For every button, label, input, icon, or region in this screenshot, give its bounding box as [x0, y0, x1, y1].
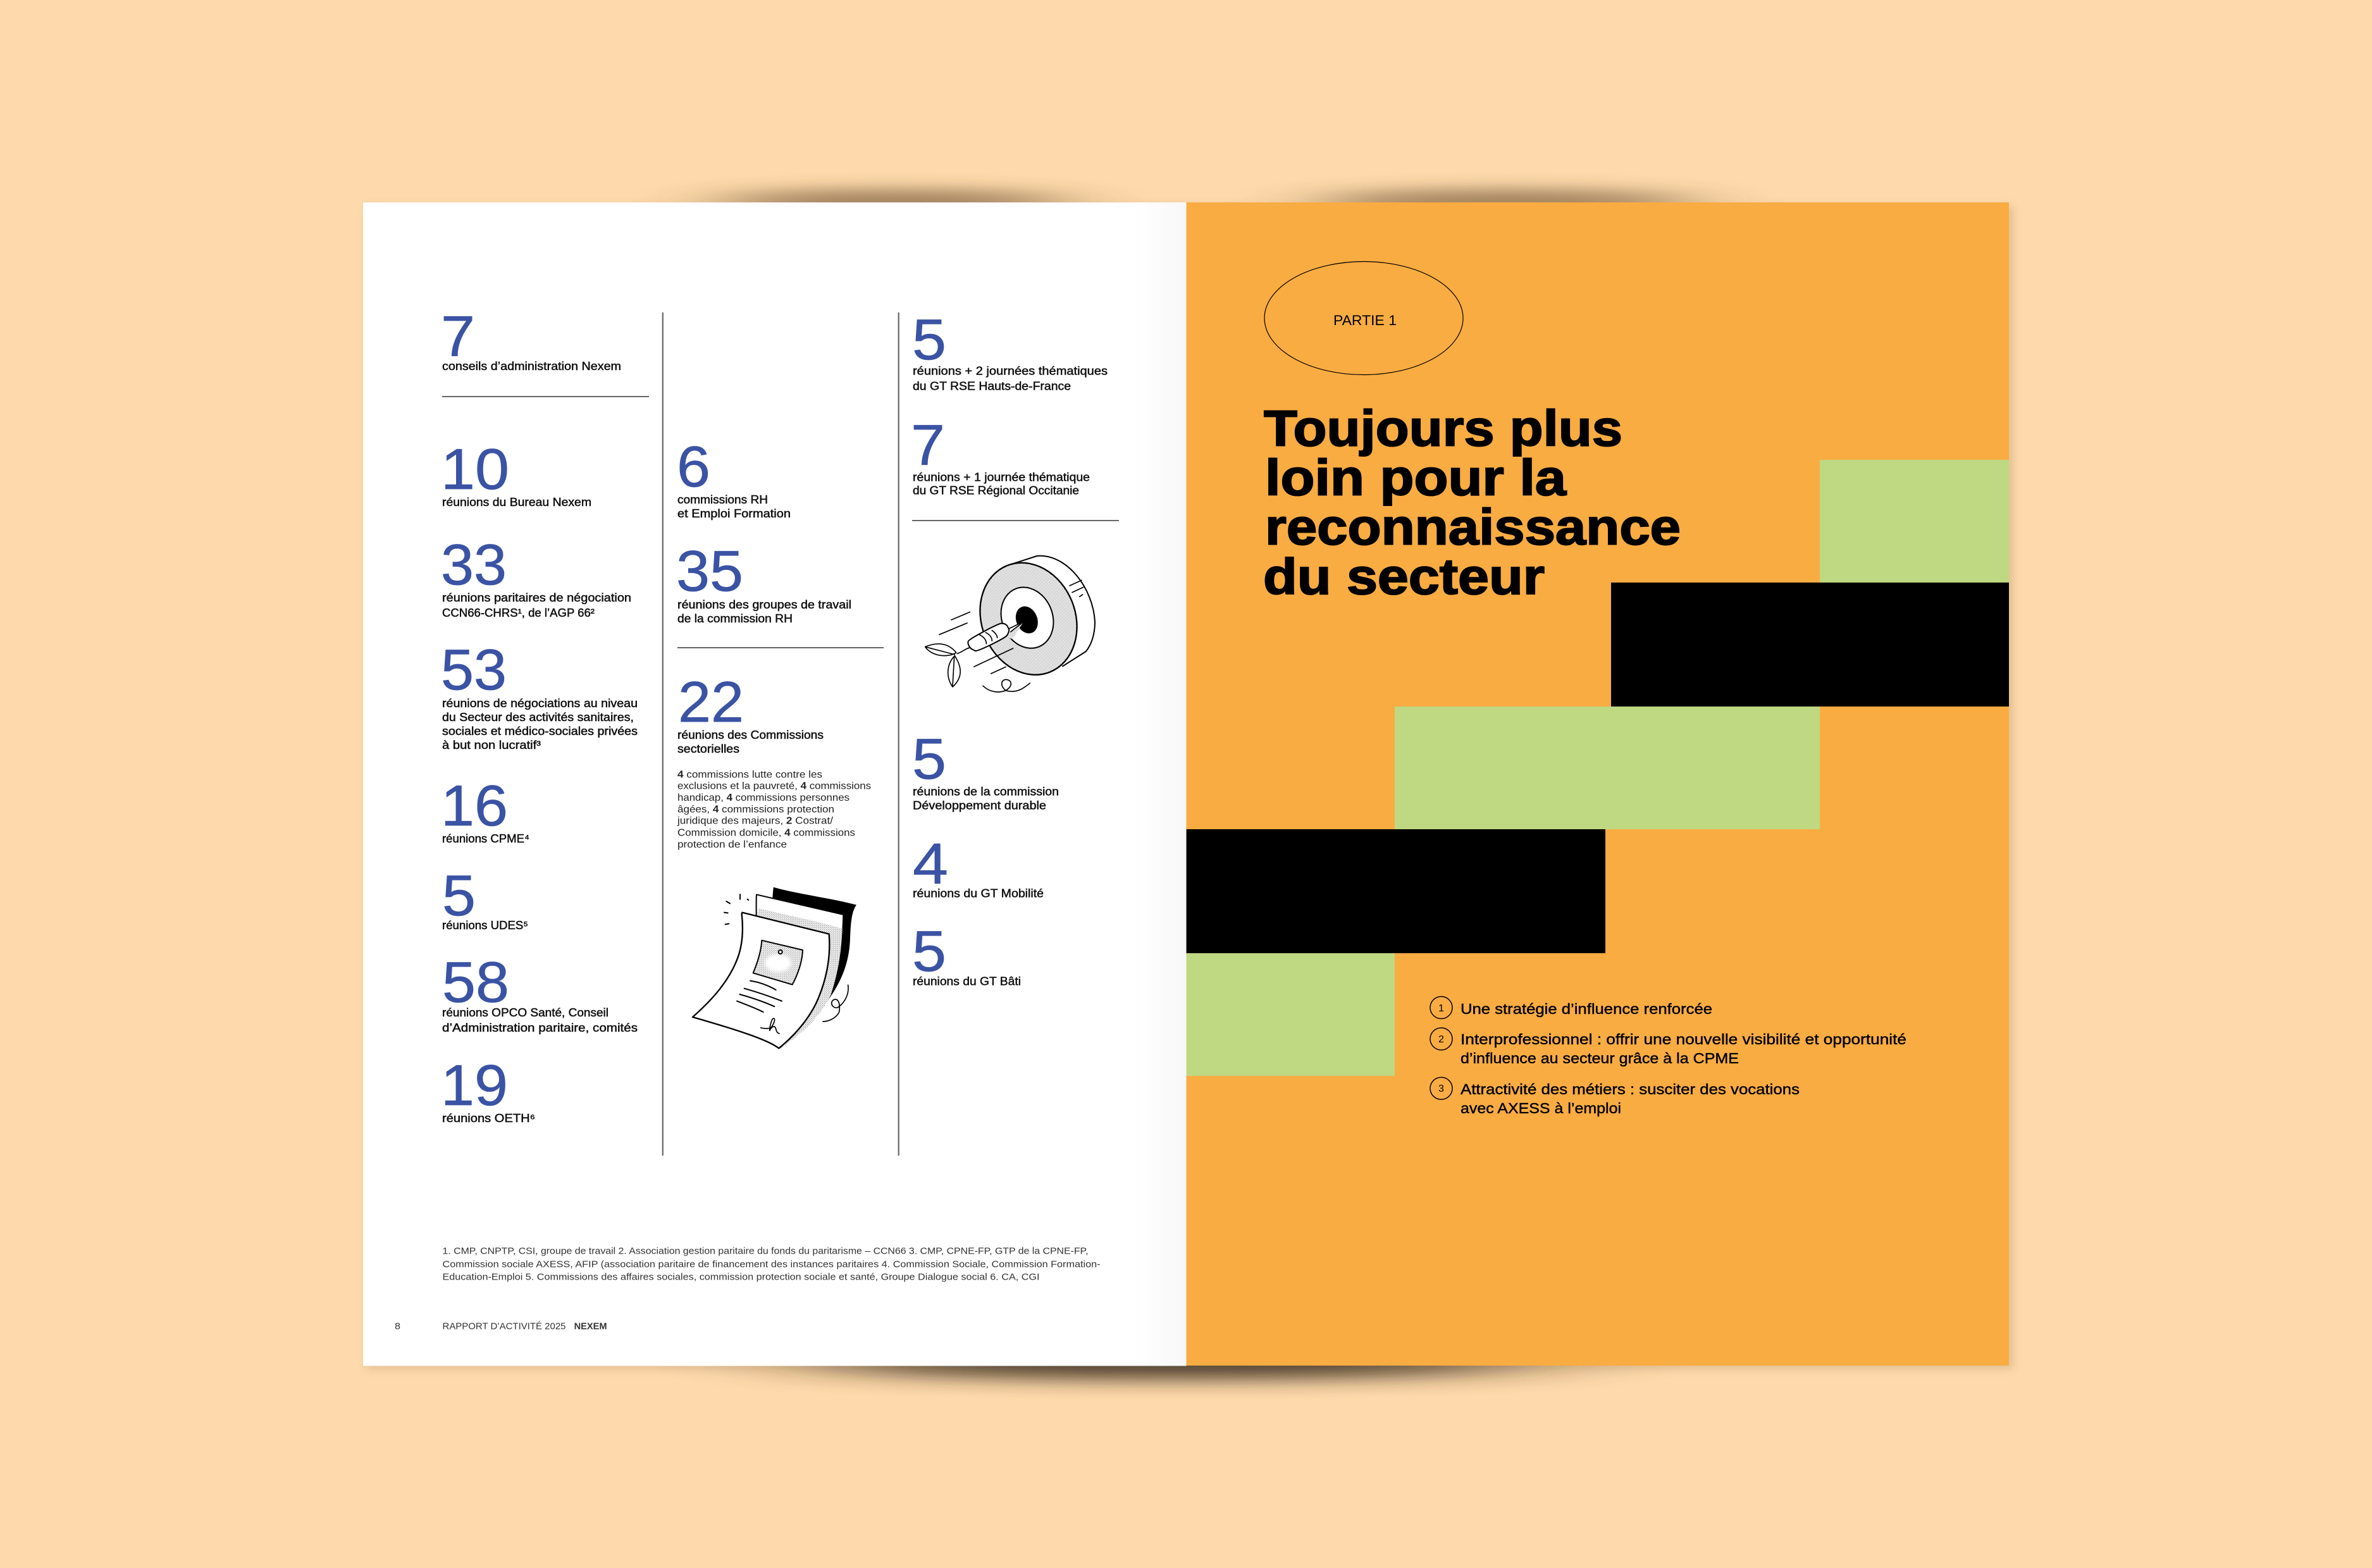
list item 3: avec AXESS à l’emploi	[1461, 1100, 1621, 1116]
stat: 7 réunions GT RSE Occitanie: réunions + 1 journée thématique	[913, 471, 1090, 484]
stat: 7 conseils	[441, 305, 621, 373]
text block: commissions detail	[677, 769, 871, 850]
text block: commissions detail: âgées, 4 commissions protection	[677, 804, 834, 815]
icon: target with dart	[925, 548, 1095, 692]
stat: 33 réunions paritaires: réunions paritaires de négociation	[442, 591, 631, 604]
stat: 7 réunions GT RSE Occitanie: du GT RSE Régional Occitanie	[913, 485, 1079, 497]
stat: 22 réunions des Commissions sectorielles: 22	[678, 670, 744, 734]
stat: 5 réunions GT Bâti: 5	[912, 920, 946, 984]
list item 2: d’influence au secteur grâce à la CPME	[1461, 1050, 1739, 1066]
icon: signed document	[693, 887, 856, 1048]
stat: 19 réunions OETH: réunions OETH⁶	[442, 1112, 535, 1125]
stat: 5 réunions GT Bâti	[912, 920, 1021, 987]
badge: partie 1	[1264, 262, 1463, 374]
stat: 6 commissions RH	[677, 435, 791, 520]
stat: 7 réunions GT RSE Occitanie: 7	[911, 414, 945, 478]
stat: 6 commissions RH: 6	[677, 435, 710, 499]
stat: 22 réunions des Commissions sectorielles	[677, 670, 824, 755]
title: Toujours plus	[1264, 400, 1622, 457]
stat: 7 conseils: 7	[441, 305, 475, 369]
stat: 10 réunions: 10	[441, 438, 509, 502]
panel: right orange page	[1187, 202, 2009, 1366]
stat: 5 réunions commission Développement durable: Développement durable	[913, 799, 1046, 812]
stat: 22 réunions des Commissions sectorielles: réunions des Commissions	[677, 729, 824, 741]
stat: 22 réunions des Commissions sectorielles: sectorielles	[677, 743, 739, 755]
list item 3: Attractivité des métiers : susciter des vocations	[1461, 1081, 1800, 1097]
footnotes	[443, 1247, 1101, 1282]
list item 3: 3	[1438, 1083, 1444, 1094]
stat: 4 réunions GT Mobilité	[913, 832, 1044, 900]
list item 3	[1430, 1077, 1800, 1116]
page footer: 8	[395, 1322, 400, 1332]
stat: 53 réunions de négociations: sociales et médico-sociales privées	[442, 725, 638, 738]
stat: 4 réunions GT Mobilité: 4	[913, 832, 948, 896]
title: reconnaissance	[1265, 499, 1681, 555]
stat: 16 réunions CPME: réunions CPME⁴	[442, 832, 529, 845]
page footer: RAPPORT D’ACTIVITÉ 2025	[443, 1321, 565, 1332]
stat: 53 réunions de négociations: réunions de négociations au niveau	[442, 697, 638, 710]
stat: 5 réunions commission Développement durable	[912, 727, 1059, 812]
rule: column 3	[912, 520, 1119, 521]
stat: 5 réunions commission Développement durable: 5	[912, 727, 946, 791]
stat: 35 réunions des groupes de travail: 35	[676, 540, 743, 603]
title: loin pour la	[1265, 449, 1567, 505]
text block: commissions detail: protection de l’enfance	[677, 839, 787, 850]
list item 2: 2	[1438, 1034, 1444, 1045]
list item 1	[1430, 997, 1712, 1018]
rule: column 2	[677, 647, 884, 648]
stat: 53 réunions de négociations: du Secteur des activités sanitaires,	[442, 711, 634, 724]
footnotes: 1. CMP, CNPTP, CSI, groupe de travail 2. Association gestion paritaire du fonds du paritarisme – CCN66 3. CMP, CPNE-FP, GTP de la CPNE-FP,	[443, 1247, 1088, 1257]
badge: partie 1: PARTIE 1	[1333, 312, 1397, 328]
stat: 6 commissions RH: commissions RH	[677, 493, 768, 506]
list item 1: 1	[1438, 1003, 1444, 1014]
stat: 53 réunions de négociations: à but non lucratif³	[442, 739, 541, 751]
stat: 58 réunions OPCO: 58	[442, 951, 509, 1015]
decorative staircase blocks	[1187, 460, 2009, 1076]
text block: commissions detail: juridique des majeurs, 2 Costrat/	[677, 816, 834, 827]
stat: 5 réunions GT RSE Hauts-de-France: du GT RSE Hauts-de-France	[913, 380, 1071, 393]
stat: 5 réunions UDES: 5	[442, 864, 476, 928]
stat: 53 réunions de négociations: 53	[441, 638, 507, 702]
page footer: NEXEM	[574, 1322, 607, 1332]
stat: 5 réunions GT RSE Hauts-de-France	[912, 308, 1108, 393]
page footer	[395, 1321, 607, 1332]
stat: 6 commissions RH: et Emploi Formation	[677, 507, 791, 520]
stat: 10 réunions: réunions du Bureau Nexem	[442, 496, 591, 509]
footnotes: Education-Emploi 5. Commissions des affaires sociales, commission protection sociale et santé, Groupe Dialogue social 6. CA, CGI	[443, 1272, 1040, 1282]
column divider 1	[662, 312, 664, 1156]
list item 1: Une stratégie d’influence renforcée	[1461, 1001, 1712, 1017]
stat: 10 réunions	[441, 438, 591, 509]
stat: 53 réunions de négociations	[441, 638, 638, 751]
stat: 58 réunions OPCO: d’Administration paritaire, comités	[442, 1022, 638, 1034]
column divider 2	[898, 312, 899, 1156]
stat: 5 réunions GT RSE Hauts-de-France: réunions + 2 journées thématiques	[913, 365, 1108, 378]
text block: commissions detail: handicap, 4 commissions personnes	[677, 793, 849, 803]
stat: 35 réunions des groupes de travail	[676, 540, 851, 625]
list item 2: Interprofessionnel : offrir une nouvelle visibilité et opportunité	[1461, 1031, 1906, 1047]
rule: column 1	[442, 396, 649, 397]
stat: 33 réunions paritaires: 33	[441, 533, 507, 597]
stat: 7 conseils: conseils d’administration Nexem	[442, 360, 621, 373]
page shadows	[367, 190, 2013, 1380]
stat: 5 réunions UDES: réunions UDES⁵	[442, 919, 528, 932]
text block: commissions detail: 4 commissions lutte contre les	[677, 769, 822, 780]
text block: commissions detail: exclusions et la pauvreté, 4 commissions	[677, 781, 871, 792]
stat: 35 réunions des groupes de travail: de la commission RH	[677, 612, 793, 625]
stat: 33 réunions paritaires: CCN66-CHRS¹, de l’AGP 66²	[442, 607, 595, 619]
stat: 35 réunions des groupes de travail: réunions des groupes de travail	[677, 598, 851, 611]
stat: 33 réunions paritaires	[441, 533, 631, 619]
stat: 5 réunions GT RSE Hauts-de-France: 5	[912, 308, 946, 372]
stat: 58 réunions OPCO	[442, 951, 638, 1034]
stat: 4 réunions GT Mobilité: réunions du GT Mobilité	[913, 887, 1044, 900]
stat: 5 réunions commission Développement durable: réunions de la commission	[913, 785, 1059, 798]
panel: left white page	[363, 202, 1187, 1366]
stat: 19 réunions OETH	[441, 1054, 535, 1125]
stat: 16 réunions CPME	[441, 774, 529, 845]
stat: 5 réunions UDES	[442, 864, 528, 932]
stat: 19 réunions OETH: 19	[441, 1054, 508, 1118]
stat: 16 réunions CPME: 16	[441, 774, 508, 838]
footnotes: Commission sociale AXESS, AFIP (association paritaire de financement des instances paritaires 4. Commission Sociale, Commission Formation-	[443, 1259, 1101, 1269]
title	[1263, 400, 1681, 605]
list item 2	[1430, 1028, 1906, 1066]
stat: 5 réunions GT Bâti: réunions du GT Bâti	[913, 975, 1021, 987]
text block: commissions detail: Commission domicile, 4 commissions	[677, 827, 855, 838]
stat: 7 réunions GT RSE Occitanie	[911, 414, 1090, 497]
title: du secteur	[1263, 548, 1545, 605]
stat: 58 réunions OPCO: réunions OPCO Santé, Conseil	[442, 1006, 608, 1019]
